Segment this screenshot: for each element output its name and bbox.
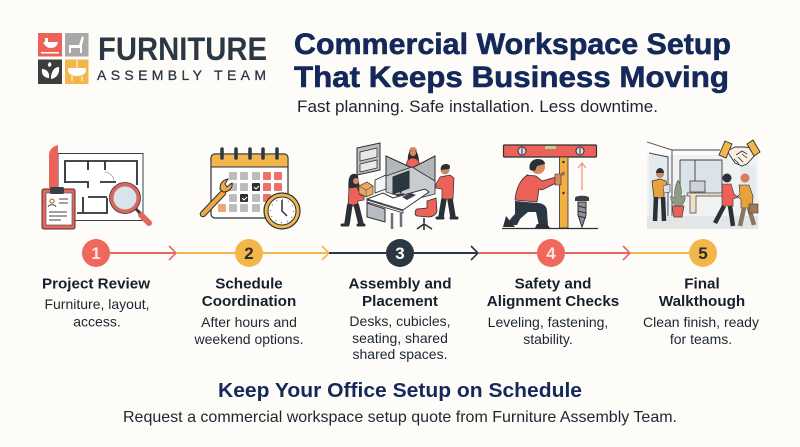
step 5 label: Final (684, 276, 720, 292)
badge 1: 1 (91, 244, 101, 263)
title: That Keeps Business Moving (294, 61, 729, 94)
step 1 description: Furniture, layout, (44, 296, 150, 312)
step 2 label: Coordination (202, 293, 296, 310)
step 5 (643, 239, 759, 347)
step 3 label: Assembly and (349, 276, 451, 292)
step 2 label (202, 276, 296, 310)
badge 5: 5 (698, 244, 708, 263)
step 1 description (44, 296, 150, 330)
step 1 description: access. (73, 314, 121, 330)
step 2 (194, 239, 303, 347)
step 4 description: stability. (523, 331, 573, 347)
step 4 (487, 239, 619, 347)
icon: calendar with wrench and clock (203, 149, 300, 229)
badge 4: 4 (546, 244, 556, 263)
step 4 label (487, 276, 619, 310)
step 5 label (659, 276, 745, 310)
badge 2: 2 (244, 244, 254, 263)
step 4 description: Leveling, fastening, (488, 314, 608, 330)
step 3 description: seating, shared (352, 330, 448, 346)
step 3 description: Desks, cubicles, (349, 313, 451, 329)
step 4 label: Alignment Checks (487, 293, 619, 310)
step 3 label (349, 276, 451, 310)
logo wordmark: FURNITURE (98, 31, 267, 67)
subtitle: Fast planning. Safe installation. Less downtime. (297, 97, 658, 116)
step 5 description: for teams. (670, 331, 732, 347)
logo: Furniture Assembly Team (38, 31, 267, 84)
call to action text: Request a commercial workspace setup quote from Furniture Assembly Team. (123, 409, 677, 426)
icon: office walkthrough with handshake (647, 140, 760, 229)
step 4 description (488, 314, 608, 347)
step 3 description: shared spaces. (353, 346, 447, 362)
logo tagline: ASSEMBLY TEAM (97, 67, 266, 83)
step 5 description (643, 314, 759, 347)
step 3 description (349, 313, 451, 362)
step 2 description: weekend options. (194, 331, 303, 347)
title (294, 28, 731, 94)
step connector line with arrows (110, 246, 689, 260)
badge 3: 3 (395, 244, 405, 263)
call to action heading: Keep Your Office Setup on Schedule (218, 380, 582, 402)
icon: floor plan with clipboard and magnifier (42, 145, 149, 229)
step 2 description: After hours and (201, 314, 297, 330)
step 5 label: Walkthough (659, 293, 745, 310)
step 2 description (194, 314, 303, 347)
icon: worker levelling a post with screw (502, 145, 598, 228)
step 4 label: Safety and (515, 276, 591, 292)
step 3 label: Placement (362, 293, 438, 310)
title: Commercial Workspace Setup (294, 28, 731, 61)
icon: team assembling a cubicle (342, 143, 457, 230)
step 2 label: Schedule (215, 276, 283, 292)
step 1 (42, 239, 150, 330)
step 5 description: Clean finish, ready (643, 314, 759, 330)
step 1 label: Project Review (42, 276, 150, 292)
step 3 (349, 239, 451, 362)
logo icon: four tile mark (38, 33, 88, 84)
